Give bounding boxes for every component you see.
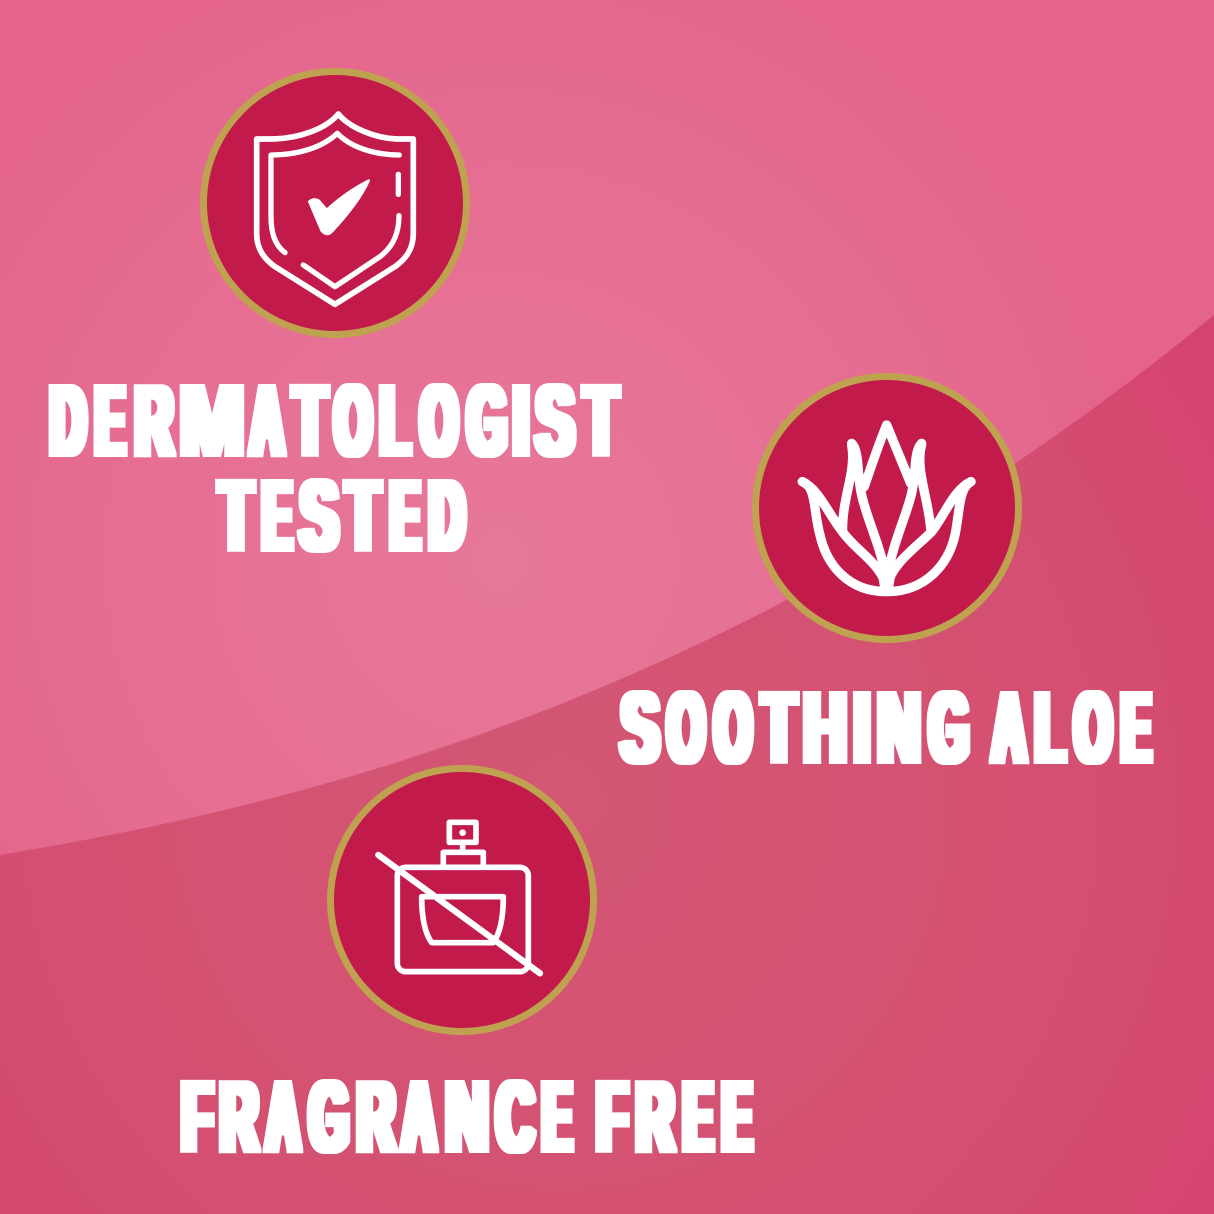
heading: dermatologist tested bbox=[48, 365, 622, 572]
heading: fragrance free: A bbox=[266, 1061, 300, 1173]
heading: fragrance free: F bbox=[182, 1061, 212, 1173]
heading: fragrance free: C bbox=[497, 1061, 533, 1173]
background: lower darker pink swoosh bbox=[0, 315, 1214, 1214]
badge: dermatologist tested shield bbox=[204, 72, 466, 334]
heading: soothing aloe: I bbox=[854, 672, 870, 784]
heading: fragrance free bbox=[180, 1061, 755, 1173]
gold ring and crimson disc bbox=[330, 768, 594, 1032]
heading: soothing aloe: O bbox=[1075, 672, 1111, 784]
heading: soothing aloe: O bbox=[668, 672, 704, 784]
heading: soothing aloe: S bbox=[621, 672, 659, 784]
heading: dermatologist tested: T bbox=[347, 460, 379, 572]
heading: dermatologist tested: I bbox=[513, 365, 529, 477]
heading: dermatologist tested: O bbox=[335, 365, 371, 477]
heading: soothing aloe: A bbox=[992, 672, 1026, 784]
heading: dermatologist tested: O bbox=[421, 365, 457, 477]
badge: soothing aloe plant bbox=[756, 376, 1018, 640]
heading: soothing aloe bbox=[618, 672, 1154, 784]
heading: fragrance free: G bbox=[310, 1061, 348, 1173]
heading: dermatologist tested: S bbox=[300, 460, 338, 572]
heading: dermatologist tested: D bbox=[429, 460, 465, 572]
heading: soothing aloe: E bbox=[1122, 672, 1150, 784]
heading: fragrance free: E bbox=[543, 1061, 571, 1173]
heading: fragrance free: R bbox=[636, 1061, 674, 1173]
heading: dermatologist tested: L bbox=[380, 365, 410, 477]
icon: aloe plant bbox=[802, 425, 971, 592]
heading: soothing aloe: T bbox=[763, 672, 795, 784]
badge: fragrance free perfume bbox=[330, 768, 594, 1032]
heading: soothing aloe: G bbox=[930, 672, 968, 784]
heading: soothing aloe: O bbox=[715, 672, 751, 784]
heading: soothing aloe: H bbox=[804, 672, 846, 784]
heading: dermatologist tested: R bbox=[135, 365, 173, 477]
icon: crossed-out perfume bottle bbox=[378, 822, 540, 973]
heading: dermatologist tested: E bbox=[96, 365, 124, 477]
heading: fragrance free: A bbox=[402, 1061, 436, 1173]
heading: dermatologist tested: A bbox=[250, 365, 284, 477]
gold ring and crimson disc bbox=[204, 72, 466, 334]
heading: soothing aloe: L bbox=[1035, 672, 1065, 784]
heading: dermatologist tested: T bbox=[585, 365, 617, 477]
heading: dermatologist tested: E bbox=[391, 460, 419, 572]
heading: fragrance free: E bbox=[723, 1061, 751, 1173]
heading: fragrance free: F bbox=[597, 1061, 627, 1173]
heading: fragrance free: R bbox=[220, 1061, 258, 1173]
heading: fragrance free: N bbox=[446, 1061, 488, 1173]
icon: shield with check mark bbox=[257, 114, 413, 304]
heading: dermatologist tested: D bbox=[50, 365, 86, 477]
heading: dermatologist tested: E bbox=[263, 460, 291, 572]
heading: dermatologist tested: S bbox=[536, 365, 574, 477]
heading: dermatologist tested: M bbox=[180, 365, 244, 477]
heading: dermatologist tested: T bbox=[294, 365, 326, 477]
heading: fragrance free: E bbox=[684, 1061, 712, 1173]
heading: dermatologist tested: T bbox=[220, 460, 252, 572]
heading: soothing aloe: N bbox=[878, 672, 920, 784]
heading: dermatologist tested: G bbox=[468, 365, 506, 477]
gold ring and crimson disc bbox=[756, 376, 1018, 640]
heading: fragrance free: R bbox=[357, 1061, 395, 1173]
